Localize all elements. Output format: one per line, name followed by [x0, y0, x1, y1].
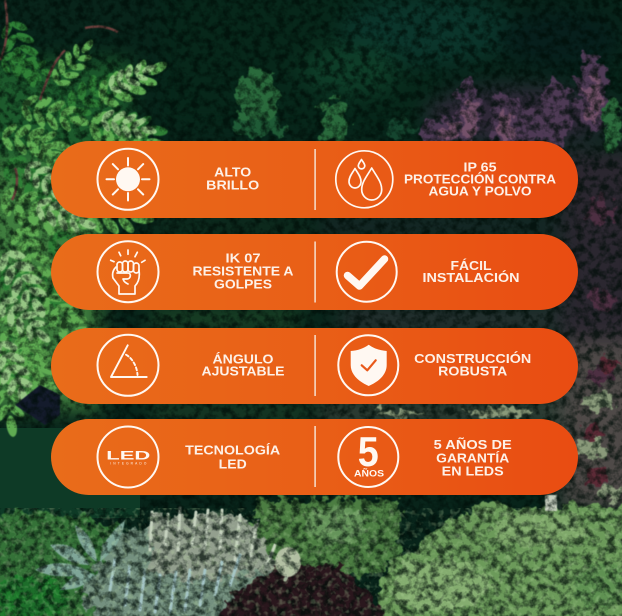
text: construccion robusta	[414, 351, 531, 378]
text: 5 anos de garantia	[434, 437, 512, 478]
purple smoke bush	[374, 52, 622, 499]
text: alto brillo: ALTO	[214, 164, 251, 180]
lower garden details	[0, 495, 557, 616]
text: construccion robusta: ROBUSTA	[438, 364, 508, 378]
text: ip 65: AGUA Y POLVO	[428, 184, 532, 199]
shrubs in the background	[232, 68, 418, 144]
text: angulo ajustable: AJUSTABLE	[202, 364, 285, 378]
icon: raised fist	[98, 241, 158, 302]
text: tecnologia led: TECNOLOGÍA	[185, 442, 281, 458]
text: construccion robusta: CONSTRUCCIÓN	[414, 351, 531, 366]
icon: sun	[98, 149, 158, 210]
icon: adjustable angle	[98, 335, 158, 396]
icon: 5 anos: 5	[358, 428, 379, 475]
text: facil instalacion	[422, 258, 520, 285]
panel: feature row 4	[51, 419, 578, 495]
text: ik 07	[192, 250, 294, 292]
text: tecnologia led: LED	[219, 456, 247, 472]
panel: feature row 2	[51, 234, 578, 310]
foliage texture	[0, 0, 622, 428]
text: tecnologia led	[185, 442, 281, 472]
text: ip 65: IP 65	[464, 160, 496, 174]
text: ik 07: IK 07	[226, 250, 260, 266]
text: 5 anos de garantia: GARANTÍA	[436, 450, 510, 466]
icon: 5 anos: AÑOS	[354, 468, 384, 479]
text: facil instalacion: INSTALACIÓN	[422, 270, 520, 285]
grass left	[0, 428, 140, 518]
text: ip 65	[404, 160, 557, 199]
text: alto brillo: BRILLO	[206, 178, 259, 192]
text: facil instalacion: FÁCIL	[450, 258, 492, 273]
icon: check mark	[337, 242, 397, 302]
icon: led integrado	[98, 426, 158, 488]
text: ik 07: GOLPES	[214, 276, 272, 292]
text: ip 65: PROTECCIÓN CONTRA	[404, 172, 557, 187]
text: angulo ajustable	[202, 352, 285, 378]
icon: led integrado: INTEGRADO	[110, 462, 147, 466]
icon: 5 anos	[338, 427, 398, 487]
icon: shield	[338, 335, 398, 395]
left tree foliage	[0, 0, 176, 440]
text: angulo ajustable: ÁNGULO	[212, 352, 274, 366]
text: 5 anos de garantia: 5 AÑOS DE	[434, 437, 512, 452]
text: 5 anos de garantia: EN LEDS	[442, 464, 504, 478]
icon: led integrado: LED	[106, 450, 150, 462]
panel: feature row 1	[51, 141, 578, 218]
icon: water drops	[336, 151, 393, 208]
text: ik 07: RESISTENTE A	[192, 264, 294, 278]
text: alto brillo	[206, 164, 259, 192]
lower garden masses	[0, 500, 622, 616]
panel: feature row 3	[51, 328, 578, 404]
